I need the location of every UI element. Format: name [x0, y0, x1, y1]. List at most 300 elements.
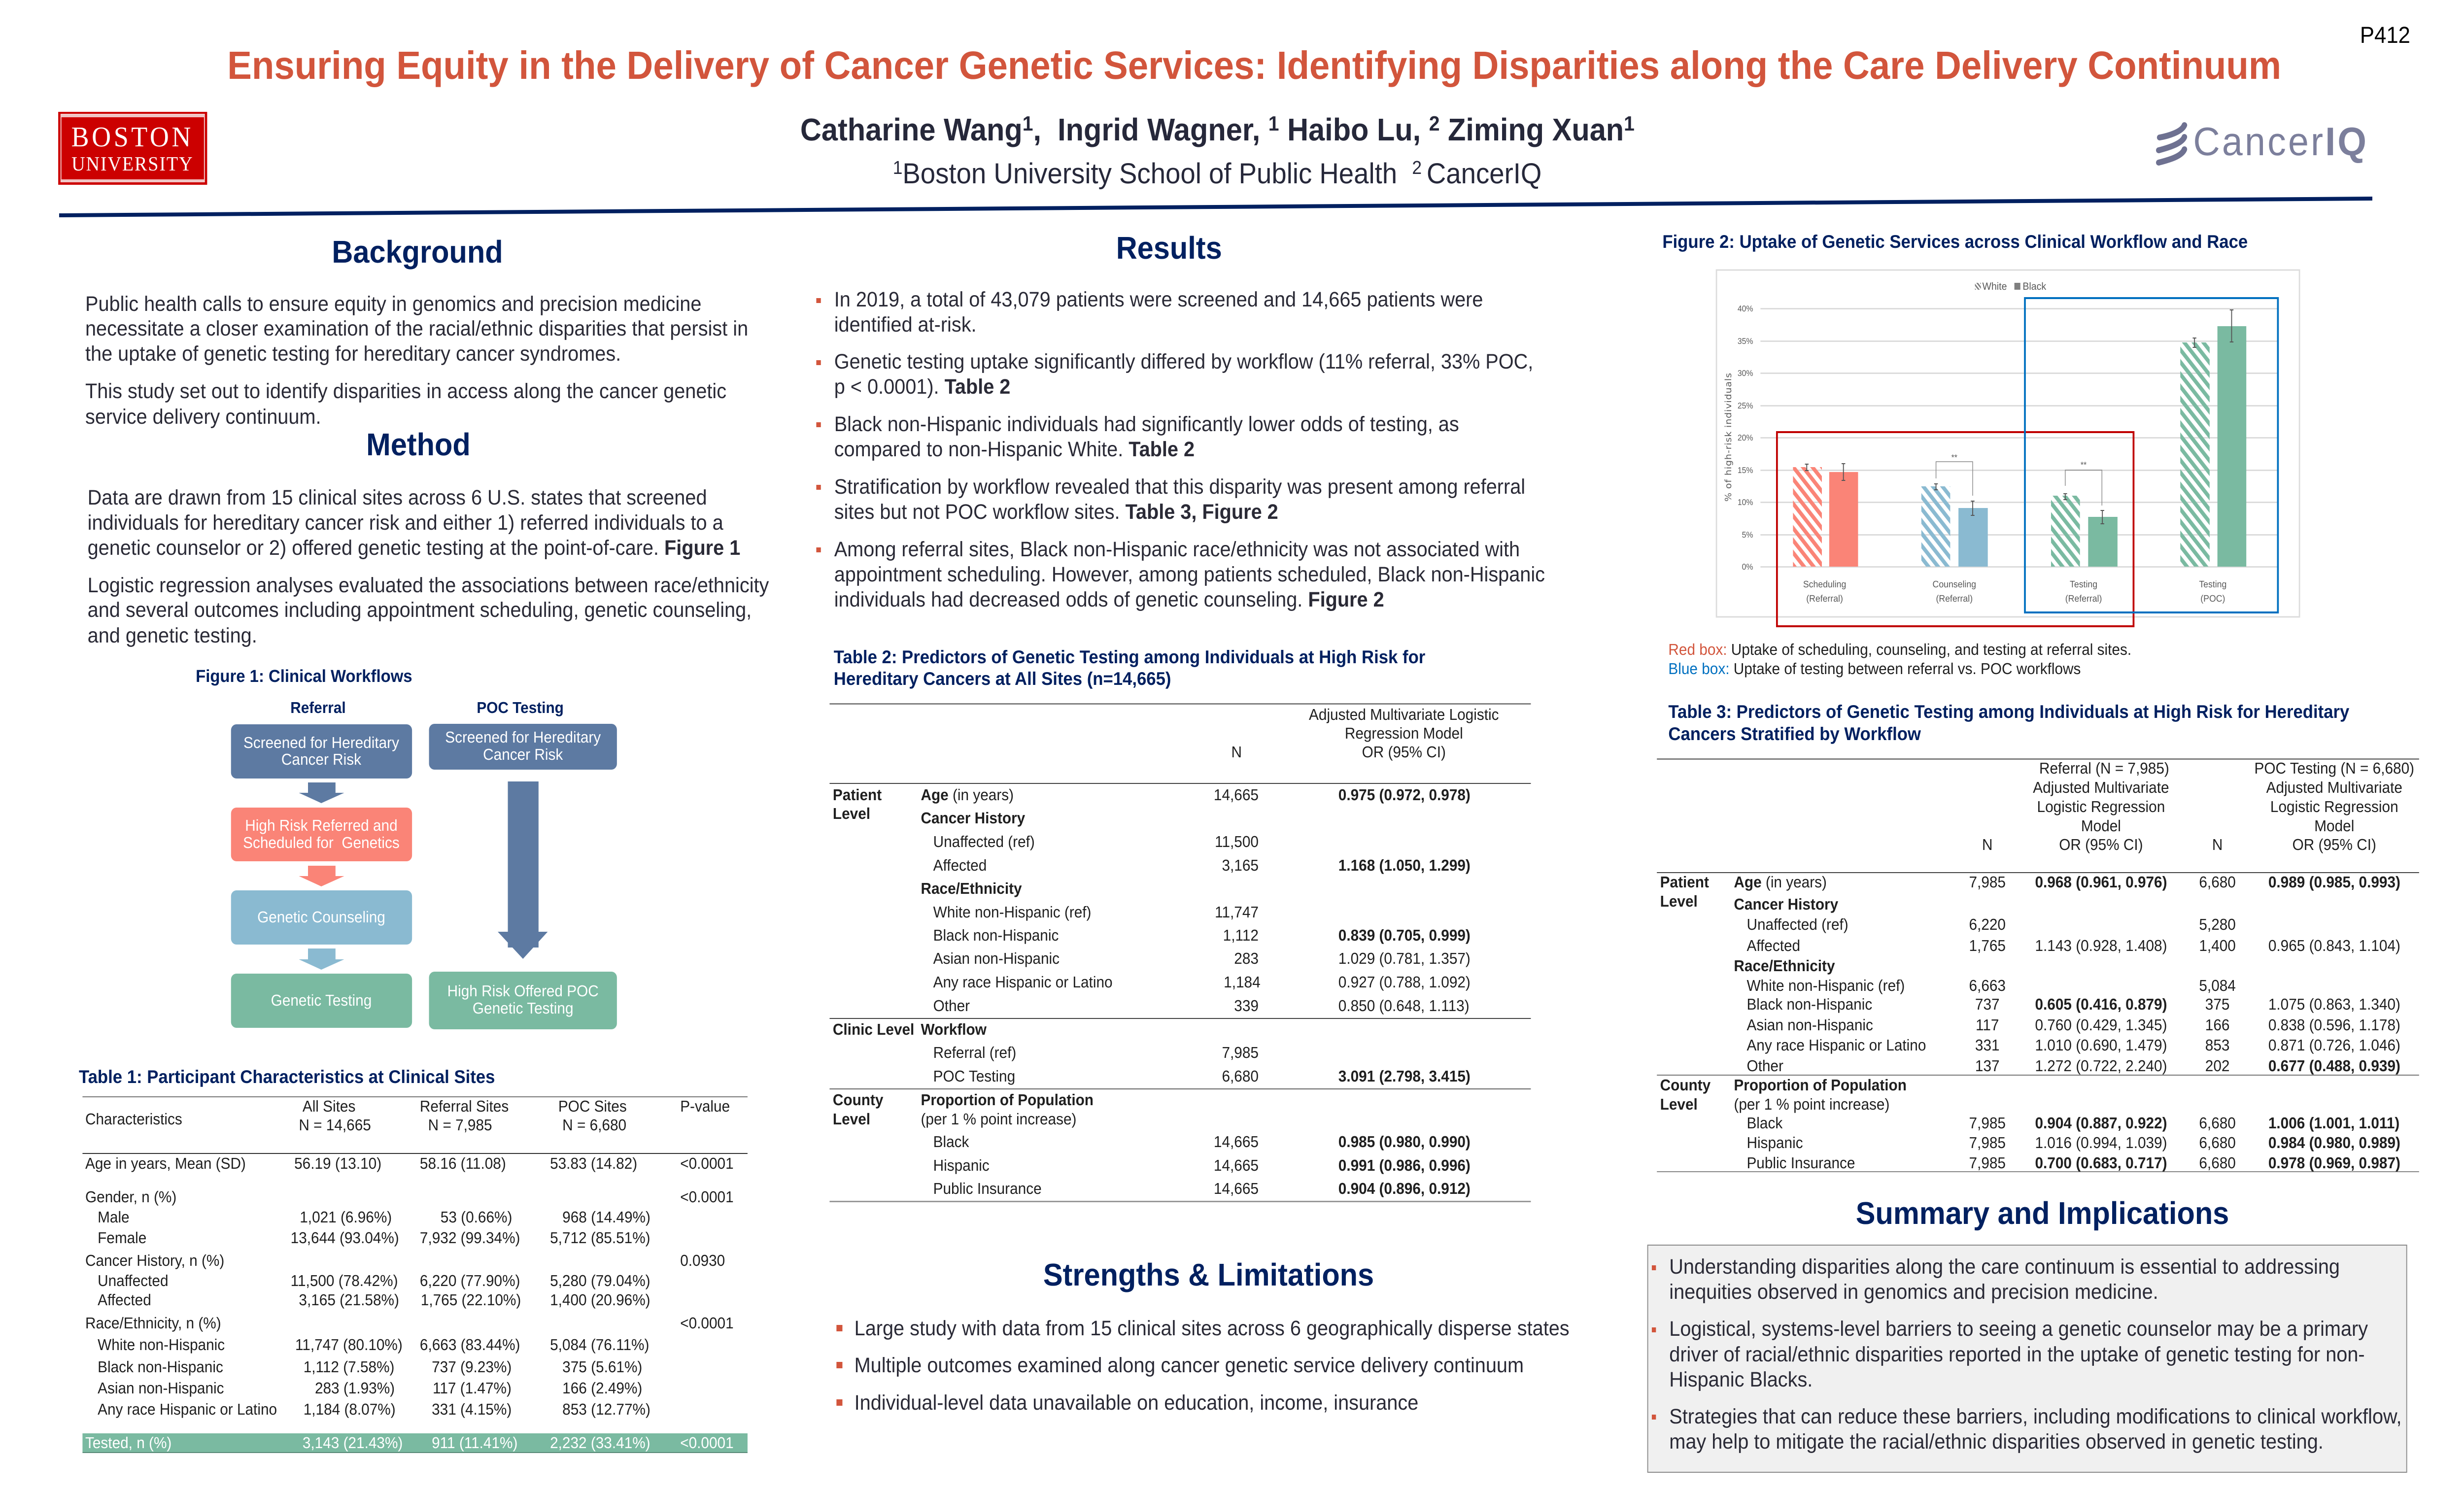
- text block: results bullets: compared to non-Hispanic White. Table 2: [834, 438, 1195, 461]
- table 3: predictors by workflow: 6,663: [1969, 977, 2006, 994]
- table 1: participant characteristics: <0.0001: [680, 1188, 734, 1206]
- table 3: predictors by workflow: 6,680: [2199, 873, 2236, 891]
- table 1: participant characteristics: Any race Hispanic or Latino: [98, 1400, 277, 1418]
- x axis categories: Testing: [2070, 579, 2097, 590]
- panel: summary: may help to mitigate the racial/ethnic disparities observed in genetic testing.: [1669, 1430, 2324, 1454]
- heading: Table 3: [1668, 701, 2350, 744]
- poster number: P412: [2360, 22, 2410, 48]
- table 1: participant characteristics: Black non-Hispanic: [98, 1358, 223, 1376]
- text block: results bullets: identified at-risk.: [834, 313, 977, 337]
- table 3: predictors by workflow: 1.272 (0.722, 2.240): [2035, 1057, 2167, 1075]
- heading: Background: Background: [332, 234, 503, 270]
- table 3: predictors by workflow: 0.984 (0.980, 0.989): [2268, 1134, 2400, 1151]
- table 2: predictors at all sites: OR (95% CI): [1362, 743, 1446, 761]
- x axis categories: Counseling: [1933, 579, 1976, 590]
- table 1: participant characteristics: Female: [98, 1229, 146, 1247]
- table 2: predictors at all sites: 14,665: [1214, 1133, 1259, 1151]
- table 2: predictors at all sites: County: [833, 1091, 884, 1109]
- table 3: predictors by workflow: 853: [2205, 1036, 2229, 1054]
- box: high risk offered POC: [429, 972, 617, 1029]
- table 3: predictors by workflow: POC Testing (N = 6,680): [2255, 759, 2414, 777]
- panel: summary: Hispanic Blacks.: [1669, 1368, 1813, 1391]
- text block: strengths bullets: Multiple outcomes examined along cancer genetic service delivery continuum: [855, 1354, 1524, 1377]
- table 1: participant characteristics: 6,220 (77.90%): [420, 1272, 520, 1289]
- table 2: predictors at all sites: 1,112: [1223, 926, 1259, 944]
- text block: background: This study set out to identify disparities in access along the cancer genetic: [85, 379, 726, 403]
- text block: results bullets: individuals had decreased odds of genetic counseling. Figure 2: [834, 588, 1384, 611]
- box: genetic counseling: [231, 890, 412, 945]
- table 3: predictors by workflow: Proportion of Population: [1734, 1076, 1907, 1094]
- table 2: predictors at all sites: 11,747: [1215, 903, 1259, 921]
- significance brackets: **: [2081, 460, 2087, 470]
- panel: summary: Understanding disparities along the care continuum is essential to addressing: [1669, 1255, 2340, 1279]
- text block: method: [88, 486, 769, 647]
- box: screened (referral): [231, 724, 412, 779]
- x axis categories: Scheduling: [1803, 579, 1846, 590]
- text block: results bullets: Among referral sites, Black non-Hispanic race/ethnicity was not associated with: [834, 538, 1520, 561]
- table 2: predictors at all sites: Patient: [833, 786, 882, 804]
- table 2: predictors at all sites: 1.168 (1.050, 1.299): [1338, 856, 1471, 874]
- y axis ticks: 40%: [1738, 304, 1753, 313]
- table 3: predictors by workflow: 1.143 (0.928, 1.408): [2035, 937, 2167, 954]
- table 3: predictors by workflow: 0.968 (0.961, 0.976): [2035, 873, 2167, 891]
- bars: testing POC: [2180, 326, 2246, 567]
- table 2: predictors at all sites: 11,500: [1215, 833, 1259, 850]
- table 2: predictors at all sites: Regression Model: [1345, 724, 1463, 742]
- table 1: participant characteristics: Gender, n (%): [85, 1188, 176, 1206]
- header rule: [59, 197, 2372, 217]
- heading: Figure 2: Figure 2: Uptake of Genetic Services across Clinical Workflow and Race: [1662, 231, 2248, 252]
- table 1: participant characteristics: Age in years, Mean (SD): [85, 1154, 246, 1172]
- text block: method: and several outcomes including appointment scheduling, genetic counseling,: [88, 598, 752, 622]
- x axis categories: (Referral): [1806, 594, 1843, 604]
- table 1: participant characteristics: Referral Sites: [420, 1097, 509, 1115]
- table 3: predictors by workflow: Referral (N = 7,985): [2039, 759, 2169, 777]
- panel: summary: Logistical, systems-level barriers to seeing a genetic counselor may be a primary: [1669, 1317, 2368, 1341]
- table 3: predictors by workflow: 1.075 (0.863, 1.340): [2268, 995, 2400, 1013]
- table 3: predictors by workflow: 5,084: [2199, 977, 2236, 994]
- table 2: predictors at all sites: (per 1 % point increase): [921, 1110, 1076, 1128]
- table 3: predictors by workflow: 0.989 (0.985, 0.993): [2268, 873, 2400, 891]
- figure 1: clinical workflows: [231, 699, 617, 1029]
- table 1: participant characteristics: 283 (1.93%): [315, 1379, 395, 1397]
- bars: testing referral: [2051, 496, 2118, 567]
- text block: results bullets: p < 0.0001). Table 2: [834, 375, 1010, 399]
- table 2: predictors at all sites: Adjusted Multivariate Logistic: [1309, 706, 1499, 723]
- table 3: predictors by workflow: 0.978 (0.969, 0.987): [2268, 1154, 2400, 1172]
- table 2: predictors at all sites: Unaffected (ref): [933, 833, 1035, 850]
- table 1: participant characteristics: 1,184 (8.07%): [304, 1400, 396, 1418]
- table 3: predictors by workflow: Model: [2081, 817, 2121, 835]
- table 2: predictors at all sites: Any race Hispanic or Latino: [933, 973, 1113, 991]
- table 2: predictors at all sites: Other: [933, 997, 970, 1015]
- table 1: participant characteristics: 13,644 (93.04%): [291, 1229, 399, 1247]
- chart legend: [1975, 281, 2047, 292]
- table 3: predictors by workflow: Logistic Regression: [2037, 798, 2165, 815]
- table 2: predictors at all sites: Proportion of Population: [921, 1091, 1094, 1109]
- heading: Results: Results: [1116, 230, 1222, 266]
- y axis label: % of high-risk individuals: [1723, 373, 1733, 502]
- text block: method: Logistic regression analyses evaluated the associations between race/ethnicity: [88, 574, 769, 597]
- logo: Boston University: [58, 112, 207, 185]
- y axis ticks: 20%: [1738, 433, 1753, 442]
- table 1: participant characteristics: <0.0001: [680, 1314, 734, 1332]
- table 3: predictors by workflow: 1.010 (0.690, 1.479): [2035, 1036, 2167, 1054]
- table 3: predictors by workflow: Black: [1746, 1114, 1783, 1132]
- table 3: predictors by workflow: Unaffected (ref): [1746, 915, 1848, 933]
- authors: 1: [1624, 112, 1635, 135]
- affiliations: 1: [893, 158, 902, 178]
- y axis ticks: 5%: [1742, 530, 1753, 540]
- table 2: predictors at all sites: 0.927 (0.788, 1.092): [1338, 973, 1471, 991]
- table 2: predictors at all sites: 6,680: [1222, 1067, 1259, 1085]
- figure 2 caption: Red box: Uptake of scheduling, counseling, and testing at referral sites.: [1668, 641, 2131, 658]
- table 2: predictors at all sites: Black: [933, 1133, 969, 1151]
- text block: strengths bullets: Individual-level data unavailable on education, income, insurance: [855, 1391, 1418, 1415]
- table 3: predictors by workflow: White non-Hispanic (ref): [1746, 977, 1905, 994]
- table 1: participant characteristics: Characteristics: [85, 1110, 182, 1128]
- table 3: predictors by workflow: N: [1982, 836, 1992, 853]
- table 1: participant characteristics: N = 14,665: [299, 1116, 371, 1134]
- table 3: predictors by workflow: Adjusted Multivariate: [2266, 779, 2402, 796]
- table 2: predictors at all sites: 14,665: [1214, 1180, 1259, 1197]
- table 3: predictors by workflow: 0.871 (0.726, 1.046): [2268, 1036, 2400, 1054]
- text block: method: individuals for hereditary cancer risk and either 1) referred individuals to a: [88, 511, 723, 535]
- table 3: predictors by workflow: 0.700 (0.683, 0.717): [2035, 1154, 2167, 1172]
- box: high risk referred: Scheduled for Genetics: [243, 834, 400, 851]
- arrow: blue: [299, 782, 344, 803]
- table 3: predictors by workflow: Other: [1746, 1057, 1783, 1075]
- red highlight box: [1777, 432, 2133, 626]
- table 3: predictors by workflow: Age (in years): [1734, 873, 1827, 891]
- box: high risk referred: [231, 808, 412, 861]
- table 1: participant characteristics: Race/Ethnicity, n (%): [85, 1314, 221, 1332]
- table 1: participant characteristics: [82, 1096, 748, 1453]
- logo: Boston University: UNIVERSITY: [71, 152, 193, 175]
- table 1: participant characteristics: Asian non-Hispanic: [98, 1379, 224, 1397]
- table 1: participant characteristics: 6,663 (83.44%): [420, 1336, 520, 1354]
- table 3: predictors by workflow: 1,765: [1969, 937, 2006, 954]
- table 3: predictors by workflow: Hispanic: [1746, 1134, 1803, 1151]
- table 3: predictors by workflow: [1657, 758, 2419, 1172]
- table 3: predictors by workflow: Logistic Regression: [2270, 798, 2398, 815]
- table 3: predictors by workflow: Asian non-Hispanic: [1746, 1016, 1873, 1034]
- table 2: predictors at all sites: 0.975 (0.972, 0.978): [1338, 786, 1471, 804]
- box: high risk offered POC: Genetic Testing: [473, 999, 573, 1017]
- text block: results bullets: [816, 288, 1545, 611]
- significance brackets: [1936, 453, 2102, 506]
- table 3: predictors by workflow: Level: [1660, 892, 1698, 910]
- table 1: participant characteristics: 3,165 (21.58%): [299, 1291, 399, 1309]
- table 2: predictors at all sites: 0.904 (0.896, 0.912): [1338, 1180, 1471, 1197]
- chart legend: White: [1983, 281, 2007, 292]
- table 1: participant characteristics: Affected: [98, 1291, 151, 1309]
- table 2: predictors at all sites: Race/Ethnicity: [921, 880, 1022, 897]
- table 2: predictors at all sites: Referral (ref): [933, 1044, 1016, 1061]
- figure 2: bar chart: [1716, 270, 2299, 626]
- text block: strengths bullets: [836, 1317, 1570, 1415]
- text block: results bullets: sites but not POC workflow sites. Table 3, Figure 2: [834, 500, 1278, 524]
- column label: Referral: Referral: [290, 699, 346, 716]
- table 3: predictors by workflow: 166: [2205, 1016, 2229, 1034]
- table 3: predictors by workflow: 0.904 (0.887, 0.922): [2035, 1114, 2167, 1132]
- figure 2 caption: [1668, 641, 2131, 677]
- y axis ticks: 10%: [1738, 498, 1753, 507]
- table 2: predictors at all sites: 0.839 (0.705, 0.999): [1338, 926, 1471, 944]
- text block: results bullets: Stratification by workflow revealed that this disparity was present among referral: [834, 475, 1525, 499]
- table 1: participant characteristics: 56.19 (13.10): [294, 1154, 381, 1172]
- table 1: participant characteristics: 375 (5.61%): [562, 1358, 642, 1376]
- box: screened (referral): Screened for Hereditary: [243, 734, 399, 751]
- table 1: participant characteristics: Cancer History, n (%): [85, 1252, 224, 1269]
- table 1: participant characteristics: 968 (14.49%): [562, 1208, 650, 1226]
- table 3: predictors by workflow: 0.838 (0.596, 1.178): [2268, 1016, 2400, 1034]
- logo: CancerIQ: CancerIQ: [2193, 120, 2368, 164]
- text block: background: service delivery continuum.: [85, 405, 321, 429]
- table 1: participant characteristics: N = 6,680: [562, 1116, 626, 1134]
- table 2: predictors at all sites: 7,985: [1222, 1044, 1259, 1061]
- text block: results bullets: Genetic testing uptake significantly differed by workflow (11% referral, 33% POC,: [834, 350, 1533, 373]
- table 2: predictors at all sites: 14,665: [1214, 1156, 1259, 1174]
- box: screened (referral): Cancer Risk: [281, 750, 362, 768]
- column label: POC Testing: POC Testing: [477, 699, 564, 716]
- table 2: predictors at all sites: Level: [833, 805, 870, 822]
- table 3: predictors by workflow: 331: [1975, 1036, 2000, 1054]
- table 2: predictors at all sites: 0.850 (0.648, 1.113): [1338, 997, 1470, 1015]
- table 2: predictors at all sites: 283: [1234, 949, 1259, 967]
- box: screened (POC): [429, 724, 617, 770]
- panel: summary: inequities observed in genomics and precision medicine.: [1669, 1280, 2158, 1304]
- authors: Catharine Wang: [800, 112, 1023, 147]
- x axis categories: Testing: [2199, 579, 2226, 590]
- table 3: predictors by workflow: Any race Hispanic or Latino: [1746, 1036, 1926, 1054]
- table 2: predictors at all sites: Public Insurance: [933, 1180, 1042, 1197]
- text block: method: and genetic testing.: [88, 624, 257, 647]
- table 1: participant characteristics: 2,232 (33.41%): [550, 1434, 650, 1452]
- heading: Method: Method: [366, 427, 471, 462]
- table 3: predictors by workflow: 6,220: [1969, 915, 2006, 933]
- panel: summary: driver of racial/ethnic disparities reported in the uptake of genetic testing for non-: [1669, 1343, 2365, 1366]
- table 3: predictors by workflow: Race/Ethnicity: [1734, 957, 1835, 975]
- table 1: participant characteristics: 58.16 (11.08): [420, 1154, 506, 1172]
- chart legend: Black: [2022, 281, 2047, 292]
- table 2: predictors at all sites: 14,665: [1214, 786, 1259, 804]
- table 3: predictors by workflow: Model: [2314, 817, 2354, 835]
- heading: Table 1: Table 1: Participant Characteristics at Clinical Sites: [79, 1066, 495, 1087]
- x axis categories: (Referral): [1936, 594, 1973, 604]
- figure 2 caption: Blue box: Uptake of testing between referral vs. POC workflows: [1668, 660, 2081, 677]
- y axis ticks: 0%: [1742, 562, 1753, 572]
- table 2: predictors at all sites: N: [1232, 743, 1242, 761]
- table 2: predictors at all sites: 0.985 (0.980, 0.990): [1338, 1133, 1471, 1151]
- table 3: predictors by workflow: 1,400: [2199, 937, 2236, 954]
- table 2: predictors at all sites: Cancer History: [921, 809, 1025, 827]
- table 1: participant characteristics: 1,400 (20.96%): [550, 1291, 650, 1309]
- table 3: predictors by workflow: 117: [1976, 1016, 1999, 1034]
- table 1: participant characteristics: 166 (2.49%): [562, 1379, 642, 1397]
- table 3: predictors by workflow: 5,280: [2199, 915, 2236, 933]
- table 1: participant characteristics: 11,747 (80.10%): [295, 1336, 403, 1354]
- table 3: predictors by workflow: Patient: [1660, 873, 1709, 891]
- table 1: participant characteristics: 11,500 (78.42%): [291, 1272, 398, 1289]
- table 3: predictors by workflow: 7,985: [1969, 1134, 2006, 1151]
- text block: background: the uptake of genetic testing for hereditary cancer syndromes.: [85, 342, 621, 366]
- table 3: predictors by workflow: (per 1 % point increase): [1734, 1095, 1889, 1113]
- table 2: predictors at all sites: 3,165: [1222, 856, 1259, 874]
- table 1: participant characteristics: Unaffected: [98, 1272, 169, 1289]
- heading: Table 3: Cancers Stratified by Workflow: [1668, 723, 1921, 744]
- error bars: [1805, 310, 2233, 524]
- table 3: predictors by workflow: Public Insurance: [1746, 1154, 1855, 1172]
- table 3: predictors by workflow: 7,985: [1969, 873, 2006, 891]
- bars: counseling: [1921, 486, 1988, 567]
- table 2: predictors at all sites: POC Testing: [933, 1067, 1015, 1085]
- table 2: predictors at all sites: White non-Hispanic (ref): [933, 903, 1091, 921]
- table 2: predictors at all sites: Age (in years): [921, 786, 1014, 804]
- table 3: predictors by workflow: OR (95% CI): [2293, 836, 2376, 853]
- table 1: participant characteristics: 7,932 (99.34%): [420, 1229, 520, 1247]
- box: screened (POC): Screened for Hereditary: [445, 728, 601, 746]
- table 3: predictors by workflow: 137: [1975, 1057, 2000, 1075]
- text block: background: [85, 292, 748, 429]
- bars: scheduling: [1793, 467, 1858, 567]
- box: genetic counseling: Genetic Counseling: [257, 908, 385, 926]
- table 2: predictors at all sites: Clinic Level: [833, 1020, 914, 1038]
- text block: method: genetic counselor or 2) offered genetic testing at the point-of-care. Figure 1: [88, 536, 740, 560]
- table 3: predictors by workflow: County: [1660, 1076, 1711, 1094]
- table 1: participant characteristics: 0.0930: [680, 1252, 725, 1269]
- table 2: predictors at all sites: 0.991 (0.986, 0.996): [1338, 1156, 1471, 1174]
- heading: Table 2: [834, 646, 1425, 689]
- table 3: predictors by workflow: 7,985: [1969, 1114, 2006, 1132]
- table 3: predictors by workflow: N: [2212, 836, 2223, 853]
- table 2: predictors at all sites: Black non-Hispanic: [933, 926, 1059, 944]
- table 2: predictors at all sites: Affected: [933, 856, 987, 874]
- heading: Figure 1: Figure 1: Clinical Workflows: [196, 667, 412, 686]
- y axis ticks: 35%: [1738, 337, 1753, 346]
- table 3: predictors by workflow: Black non-Hispanic: [1746, 995, 1872, 1013]
- table 1: participant characteristics: 3,143 (21.43%): [303, 1434, 403, 1452]
- table 2: predictors at all sites: 3.091 (2.798, 3.415): [1338, 1067, 1471, 1085]
- logo: Boston University: BOSTON: [71, 121, 194, 153]
- y axis ticks: 15%: [1738, 466, 1753, 475]
- table 1: participant characteristics: N = 7,985: [428, 1116, 492, 1134]
- box: high risk referred: High Risk Referred and: [245, 816, 398, 834]
- table 1: participant characteristics: 1,765 (22.10%): [421, 1291, 521, 1309]
- authors: Ziming Xuan: [1439, 112, 1624, 147]
- authors: , Ingrid Wagner,: [1033, 112, 1268, 147]
- table 1: participant characteristics: Male: [98, 1208, 130, 1226]
- table 1: participant characteristics: 5,280 (79.04%): [550, 1272, 650, 1289]
- table 3: predictors by workflow: 6,680: [2199, 1134, 2236, 1151]
- significance brackets: **: [1951, 453, 1957, 462]
- text block: background: Public health calls to ensure equity in genomics and precision medicine: [85, 292, 701, 316]
- table 3: predictors by workflow: 6,680: [2199, 1114, 2236, 1132]
- heading: Table 2: Hereditary Cancers at All Sites (n=14,665): [834, 668, 1171, 689]
- table 1: participant characteristics: 5,084 (76.11%): [550, 1336, 649, 1354]
- table 1: participant characteristics: 737 (9.23%): [432, 1358, 512, 1376]
- table 1: participant characteristics: 911 (11.41%): [432, 1434, 517, 1452]
- table 2: predictors at all sites: Workflow: [921, 1020, 987, 1038]
- arrow: long POC: [498, 781, 548, 959]
- table 3: predictors by workflow: 0.605 (0.416, 0.879): [2035, 995, 2167, 1013]
- table 3: predictors by workflow: Cancer History: [1734, 895, 1838, 913]
- table 2: predictors at all sites: 1.029 (0.781, 1.357): [1338, 949, 1471, 967]
- panel: summary: Strategies that can reduce these barriers, including modifications to clinical workflow,: [1669, 1405, 2402, 1428]
- box: high risk offered POC: High Risk Offered POC: [447, 982, 599, 1000]
- authors: 1: [1023, 112, 1033, 135]
- table 2: predictors at all sites: 1,184: [1224, 973, 1261, 991]
- box: genetic testing: Genetic Testing: [271, 991, 372, 1009]
- table 3: predictors by workflow: 7,985: [1969, 1154, 2006, 1172]
- table 1: participant characteristics: 853 (12.77%): [562, 1400, 650, 1418]
- text block: method: Data are drawn from 15 clinical sites across 6 U.S. states that screened: [88, 486, 707, 509]
- heading: Strengths & Limitations: Strengths & Limitations: [1043, 1257, 1374, 1292]
- authors: 1: [1268, 112, 1279, 135]
- table 1: participant characteristics: All Sites: [303, 1097, 355, 1115]
- text block: results bullets: Black non-Hispanic individuals had significantly lower odds of testing, as: [834, 412, 1459, 436]
- table 2: predictors at all sites: Hispanic: [933, 1156, 990, 1174]
- table 1: participant characteristics: 53.83 (14.82): [550, 1154, 637, 1172]
- table 3: predictors by workflow: 0.760 (0.429, 1.345): [2035, 1016, 2167, 1034]
- x axis categories: [1803, 579, 2226, 604]
- heading: Table 2: Table 2: Predictors of Genetic Testing among Individuals at High Risk for: [834, 646, 1425, 667]
- table 3: predictors by workflow: 1.006 (1.001, 1.011): [2268, 1114, 2399, 1132]
- x axis categories: (Referral): [2065, 594, 2102, 604]
- table 1: participant characteristics: P-value: [680, 1097, 730, 1115]
- table 3: predictors by workflow: Affected: [1746, 937, 1800, 954]
- table 1: participant characteristics: <0.0001: [680, 1154, 734, 1172]
- authors: 2: [1429, 112, 1439, 135]
- table 1: participant characteristics: 117 (1.47%): [433, 1379, 512, 1397]
- table 3: predictors by workflow: 737: [1975, 995, 2000, 1013]
- table 1: participant characteristics: Tested, n (%): [85, 1434, 171, 1452]
- table 3: predictors by workflow: 202: [2205, 1057, 2229, 1075]
- box: genetic testing: [231, 974, 412, 1028]
- table 3: predictors by workflow: Level: [1660, 1095, 1698, 1113]
- table 3: predictors by workflow: OR (95% CI): [2059, 836, 2143, 853]
- affiliations: 2: [1412, 158, 1427, 178]
- table 1: participant characteristics: 5,712 (85.51%): [550, 1229, 650, 1247]
- text block: strengths bullets: Large study with data from 15 clinical sites across 6 geographically disperse states: [855, 1317, 1570, 1340]
- text block: background: necessitate a closer examination of the racial/ethnic disparities that persist in: [85, 317, 748, 340]
- table 3: predictors by workflow: 6,680: [2199, 1154, 2236, 1172]
- heading: Table 3: Table 3: Predictors of Genetic Testing among Individuals at High Risk for Hereditary: [1668, 701, 2350, 722]
- table 3: predictors by workflow: Adjusted Multivariate: [2033, 779, 2169, 796]
- table 1: participant characteristics: 1,021 (6.96%): [300, 1208, 392, 1226]
- y axis ticks: [1738, 304, 1753, 572]
- table 1: participant characteristics: 53 (0.66%): [441, 1208, 512, 1226]
- table 3: predictors by workflow: 0.677 (0.488, 0.939): [2268, 1057, 2400, 1075]
- y axis ticks: 25%: [1738, 401, 1753, 410]
- text block: results bullets: appointment scheduling. However, among patients scheduled, Black non-Hispanic: [834, 563, 1545, 586]
- affiliations: CancerIQ: [1427, 158, 1541, 190]
- table 1: participant characteristics: 1,112 (7.58%): [304, 1358, 394, 1376]
- table 2: predictors at all sites: [829, 703, 1531, 1202]
- table 2: predictors at all sites: 339: [1234, 997, 1259, 1015]
- x axis categories: (POC): [2200, 594, 2225, 604]
- y axis ticks: 30%: [1738, 369, 1753, 378]
- authors: Haibo Lu,: [1279, 112, 1429, 147]
- title: Ensuring Equity in the Delivery of Cancer Genetic Services: Identifying Disparities along the Care Delivery Continuum: [227, 43, 2281, 87]
- heading: Summary and Implications: Summary and Implications: [1856, 1195, 2229, 1231]
- text block: results bullets: In 2019, a total of 43,079 patients were screened and 14,665 patients were: [834, 288, 1483, 311]
- table 1: participant characteristics: White non-Hispanic: [98, 1336, 225, 1354]
- table 2: predictors at all sites: Asian non-Hispanic: [933, 949, 1060, 967]
- table 1: participant characteristics: 331 (4.15%): [432, 1400, 512, 1418]
- affiliations: Boston University School of Public Health: [902, 158, 1412, 190]
- table 1: participant characteristics: <0.0001: [680, 1434, 734, 1452]
